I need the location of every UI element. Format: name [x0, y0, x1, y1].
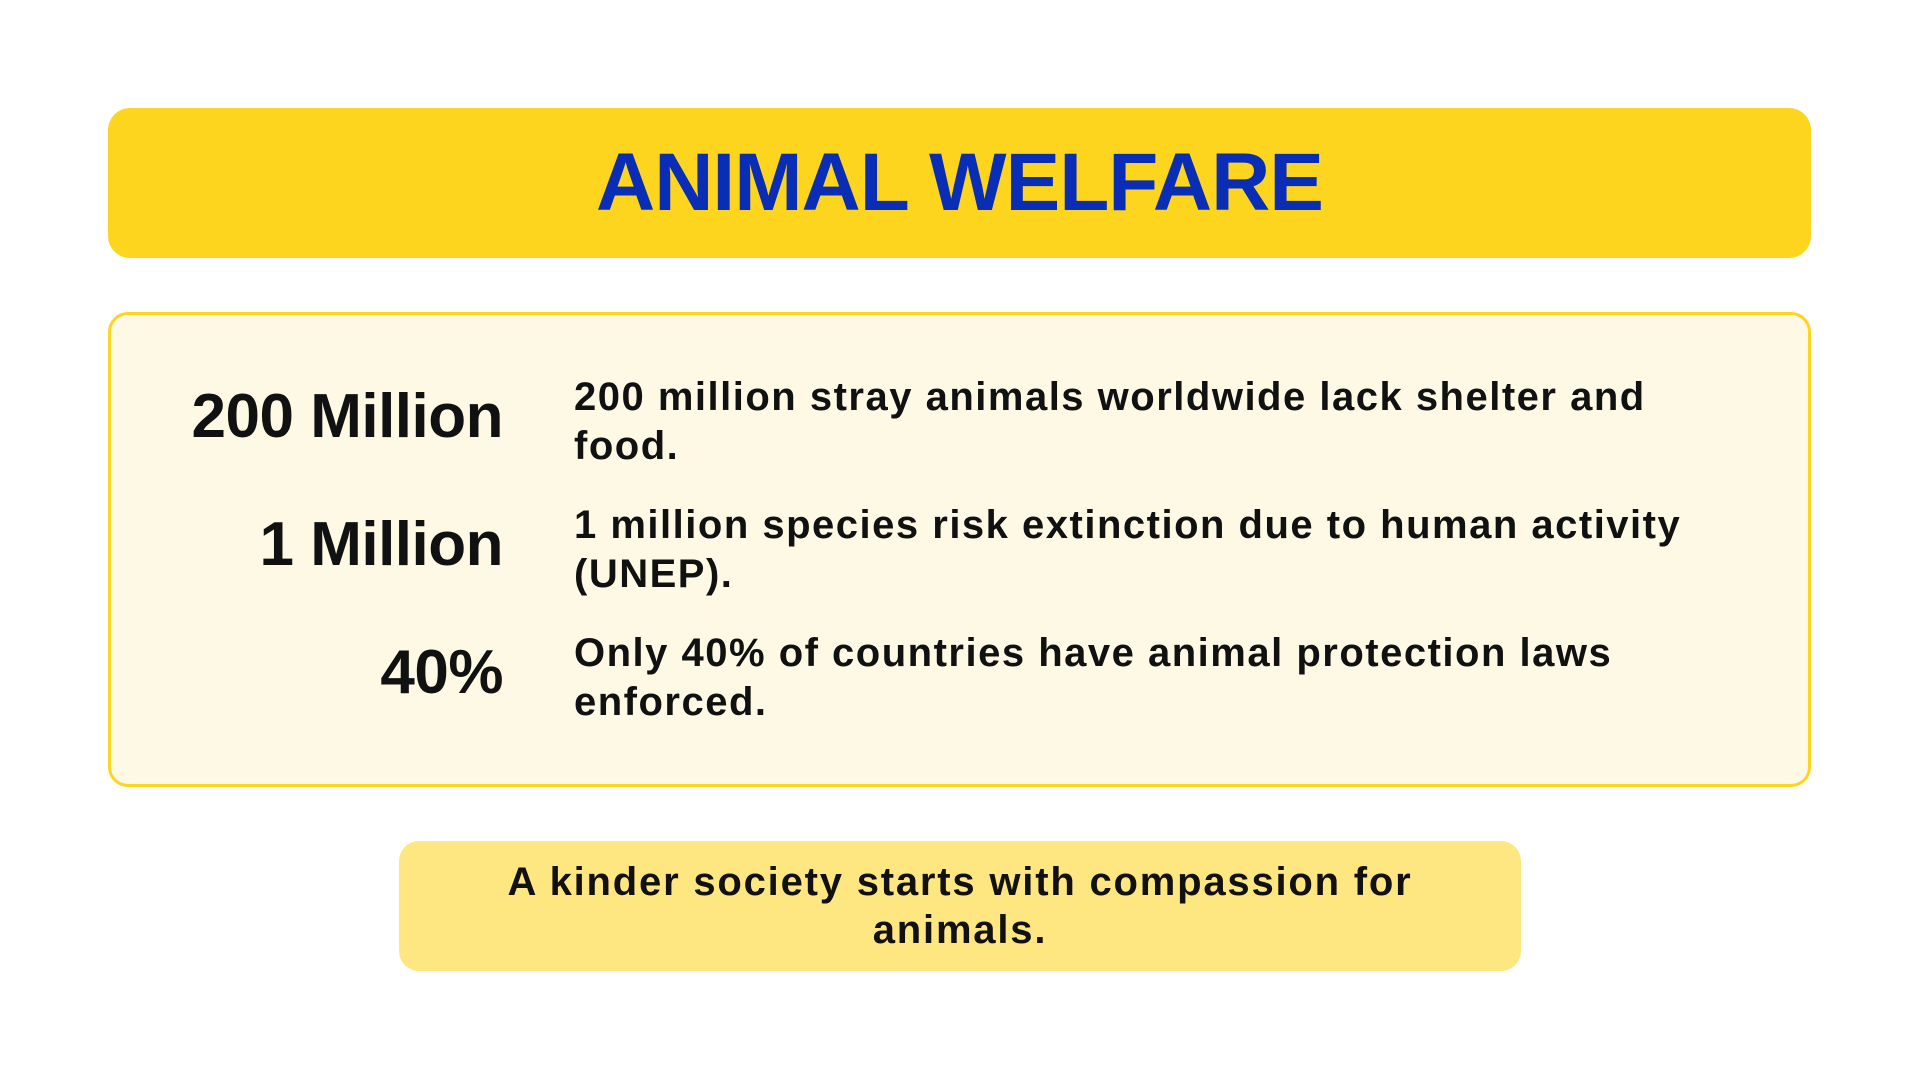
footer callout: animals. [873, 908, 1047, 952]
stat number: 1 Million [260, 510, 503, 579]
stat description [574, 375, 1646, 468]
title text: ANIMAL WELFARE [596, 137, 1323, 228]
title banner [108, 108, 1811, 258]
stat number: 40% [380, 638, 503, 707]
stat description: food. [574, 424, 679, 468]
footer callout [399, 841, 1521, 971]
stat description: enforced. [574, 680, 768, 724]
stat description [574, 631, 1612, 724]
panel: statistics [108, 312, 1811, 787]
footer callout: A kinder society starts with compassion for [507, 860, 1413, 904]
stat row: 200 million [192, 375, 1646, 468]
stat description: 200 million stray animals worldwide lack shelter and [574, 375, 1646, 419]
stat description [574, 503, 1681, 596]
stat number: 200 Million [192, 382, 503, 451]
stat row: 40% [380, 631, 1612, 724]
stat row: 1 million [260, 503, 1681, 596]
stat description: 1 million species risk extinction due to human activity [574, 503, 1681, 547]
stat description: Only 40% of countries have animal protection laws [574, 631, 1612, 675]
stat description: (UNEP). [574, 552, 733, 596]
